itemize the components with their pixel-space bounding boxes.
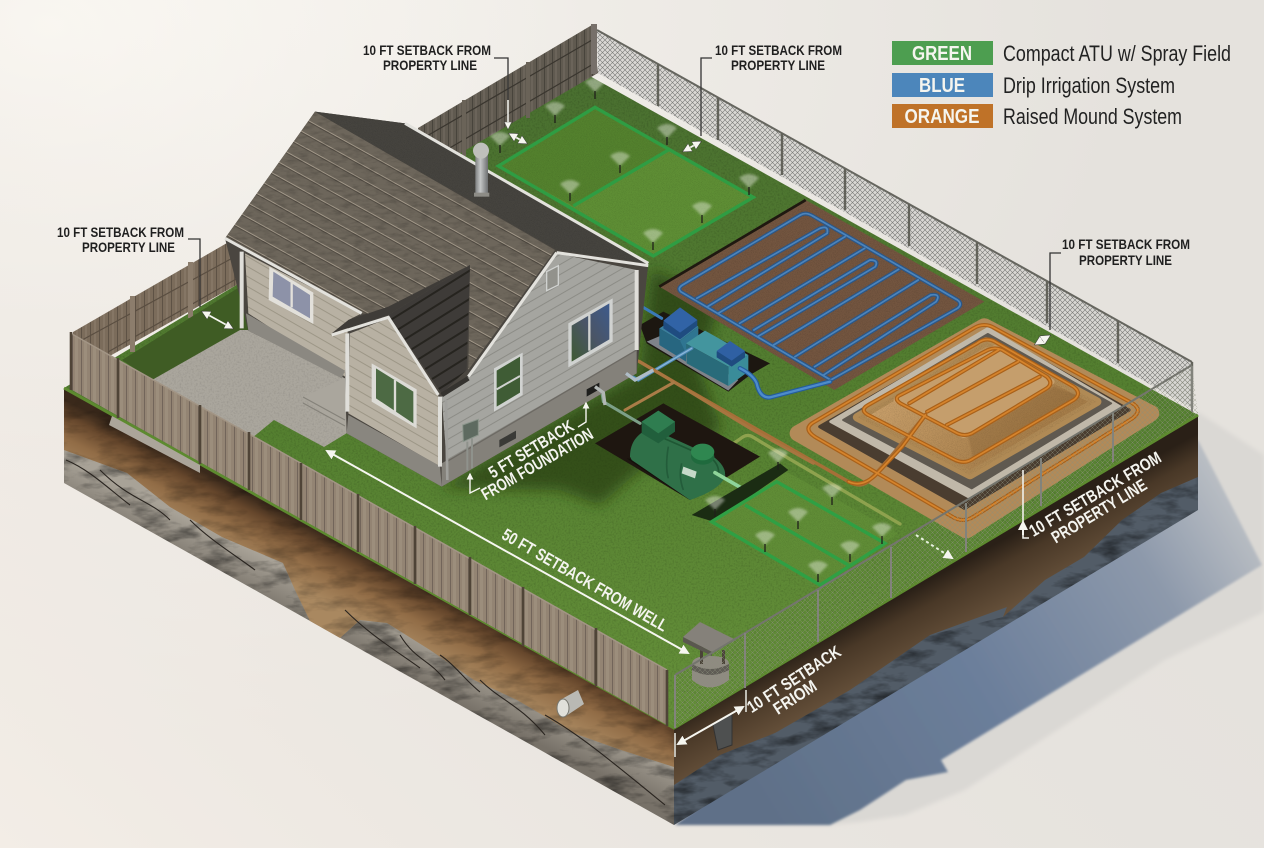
setback callout: right: PROPERTY LINE [1079, 252, 1172, 268]
tan sewer lines and ATU feed [625, 361, 900, 524]
well setback label and arrow [327, 451, 688, 653]
pipe stub in soil [557, 690, 584, 717]
electric meter box [463, 419, 478, 442]
foundation setback label and arrows: FROM FOUNDATION [478, 425, 597, 504]
setback callout: top centre [363, 42, 526, 143]
drip irrigation bed and tubing [659, 200, 984, 390]
rear window [269, 267, 313, 324]
corner setback label and arrow [675, 642, 845, 757]
ATU tanks, blue [627, 305, 830, 397]
spray field: green top [498, 107, 753, 256]
fascia trim [225, 123, 648, 395]
setback callout: right: 10 FT SETBACK FROM [1062, 236, 1190, 252]
tank pit [640, 312, 770, 392]
right soil face [674, 415, 1198, 825]
tank access lids [642, 411, 675, 443]
aerobic tank [686, 331, 748, 386]
legend orange: Raised Mound System [1003, 104, 1182, 129]
stone well [683, 622, 736, 688]
legend green: GREEN [912, 43, 972, 65]
left soil face [64, 388, 674, 825]
big window [568, 298, 613, 367]
blue tubing serpentine [679, 214, 960, 380]
chain-link fence, front right [675, 365, 1198, 728]
back yard strip [122, 288, 248, 380]
setback callout: left: PROPERTY LINE [82, 239, 175, 255]
pretreatment tank [659, 307, 698, 362]
fence posts [71, 332, 667, 726]
setback callout: left [57, 224, 232, 328]
legend [892, 41, 1231, 129]
downspouts and corner trim [242, 252, 637, 467]
orange distribution pipes [640, 325, 1138, 520]
well setback label and arrow: 50 FT SETBACK FROM WELL [499, 525, 671, 635]
legend orange: ORANGE [904, 106, 980, 128]
house shadow on lawn [440, 270, 722, 505]
back wooden fence, left of house [73, 243, 240, 380]
mound layers [799, 327, 1150, 530]
right block setback label and arrow [916, 448, 1165, 558]
fence footing [109, 416, 200, 473]
gable vent [547, 266, 558, 291]
green spray field pipe [498, 107, 753, 256]
foundation outlet [587, 383, 599, 397]
blue pipes from house and to field [627, 305, 830, 397]
spray field: green lower [692, 463, 898, 585]
small window [494, 353, 523, 412]
corner setback label and arrow: FRIOM [770, 676, 820, 718]
house footprint backing [225, 112, 648, 487]
treated effluent pipe [715, 473, 747, 500]
legend orange [892, 104, 1182, 129]
main roof dark plane [315, 112, 648, 263]
small front gable wall [347, 318, 442, 487]
sprinklers of lower field [705, 449, 892, 582]
legend blue [892, 73, 1175, 98]
cast shadow of the block on the ground [675, 412, 1264, 825]
front window [372, 363, 417, 428]
chain-link fence, back right [597, 30, 1192, 408]
house [225, 112, 653, 487]
front wooden fence [71, 332, 667, 726]
front gable dark roof [388, 265, 470, 393]
setback callout: top right [684, 42, 842, 151]
inlet pipe from house [593, 387, 640, 423]
tank body [630, 432, 725, 500]
legend blue: BLUE [919, 75, 965, 97]
concrete patio [152, 330, 352, 447]
ground block cross-section [64, 388, 1198, 825]
main roof light plane [225, 112, 555, 370]
right block setback label and arrow: PROPERTY LINE [1048, 475, 1150, 547]
legend green [892, 41, 1231, 66]
setback callout: top right: 10 FT SETBACK FROM [715, 42, 842, 58]
corner setback label and arrow: 10 FT SETBACK [744, 642, 845, 717]
setback callout: top right: PROPERTY LINE [731, 57, 825, 73]
roof vent stack [473, 143, 489, 197]
right block setback label and arrow: 10 FT SETBACK FROM [1026, 448, 1165, 541]
setback callout: top centre: 10 FT SETBACK FROM [363, 42, 491, 58]
setback callout: right [1036, 236, 1190, 344]
raised mound system [640, 325, 1150, 530]
sprinklers of top field [490, 78, 759, 250]
lawn surface [64, 75, 1198, 728]
setback callout: left: 10 FT SETBACK FROM [57, 224, 184, 240]
tank pit [595, 403, 760, 500]
setback callout: top centre: PROPERTY LINE [383, 57, 477, 73]
back wooden fence, behind house [418, 24, 598, 165]
green pipe grid [712, 482, 885, 585]
compact ATU septic tank [593, 387, 760, 500]
legend blue: Drip Irrigation System [1003, 73, 1175, 98]
crawl vent [499, 431, 516, 447]
mound crown [897, 348, 1051, 435]
foundation setback label and arrows: 5 FT SETBACK [485, 416, 578, 482]
rear wall [245, 253, 362, 378]
right gable wall [442, 253, 653, 487]
